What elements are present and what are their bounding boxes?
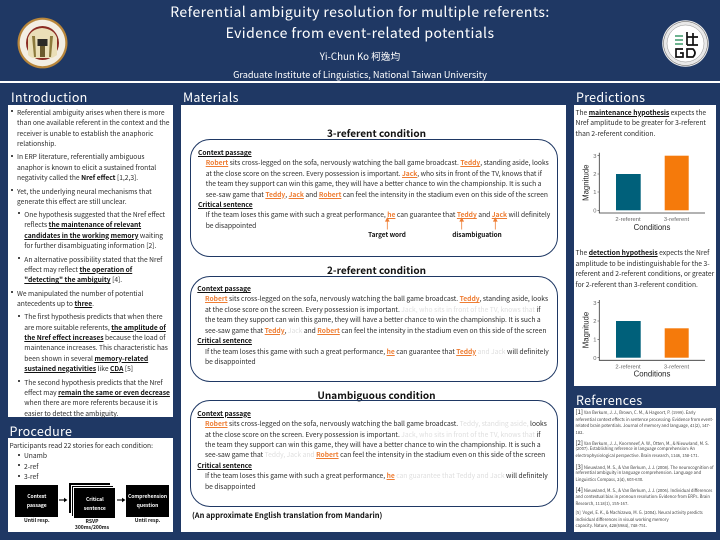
chart: detection hypothesis bars: 0 [593, 356, 596, 362]
panel: references [574, 408, 716, 532]
panel: procedure: 3-ref [24, 471, 38, 481]
panel: references: Linguistics Compass, 2(4), 603-630. [576, 477, 643, 483]
condition: 3-referent: be disappointed [206, 220, 256, 230]
panel: introduction: An alternative possibility stated that the Nref [24, 254, 162, 264]
panel: introduction: than one available referent in the context and the [17, 117, 169, 127]
header: title and author [18, 2, 709, 81]
logo: National Taiwan University seal [18, 18, 68, 68]
label: RSVP timing: RSVP [86, 518, 98, 525]
heading: 2-referent condition: 2-referent condition [327, 262, 426, 277]
condition: 3-referent: Robert sits cross-legged on the sofa, nervously watching the ball game broadcast. Teddy, standing aside, looks [206, 157, 549, 167]
panel: introduction: negativity called the Nref effect [1,2,3]. [17, 172, 138, 182]
condition: 2-referent: Context passage [197, 283, 251, 293]
heading: References: References [576, 390, 642, 408]
logo: Graduate Institute of Linguistics seal [662, 20, 709, 67]
panel: references: referential context effects in sentence processing: Evidence from event- [576, 417, 713, 423]
box stack: critical sentence: sentence [84, 505, 106, 512]
title [170, 2, 550, 43]
chart: maintenance hypothesis bars: 2 [593, 172, 596, 178]
panel: references: [5] Vogel, E. K., & Machizawa, M. G. (2004). Neural activity predicts [576, 510, 703, 516]
text: maintenance hypothesis: Nref amplitude to be greater for 3-referent [576, 117, 706, 127]
chart: maintenance hypothesis bars: 1 [593, 190, 596, 196]
panel: references: (2007). Establishing reference in language comprehension: An [576, 446, 695, 452]
panel: introduction: Referential ambiguity arises when there is more [17, 106, 165, 116]
condition: 3-referent: Critical sentence [198, 199, 253, 209]
panel: references: referential ambiguity in language comprehension. Language and [576, 470, 701, 476]
panel: procedure [8, 438, 173, 532]
condition: 3-referent: at the close score on the screen. Every possession is important. Jack, who sits in front of the TV, knows that if [206, 168, 542, 178]
box stack: critical sentence [69, 483, 115, 518]
condition: unambiguous: Robert sits cross-legged on the sofa, nervously watching the ball game broadcast. Teddy, standing aside, looks [205, 418, 547, 428]
panel: references: individual differences in visual working memory [576, 517, 669, 523]
condition: 2-referent: see-saw game that Teddy, Jack and Robert can feel the intensity in the stadium even on this side of the screen [205, 324, 546, 334]
condition: 2-referent: If the team loses this game with such a great performance, he can guarantee that Teddy and Jack will definitely [205, 346, 549, 356]
condition: 3-referent: the team they support can win this game, they will have a better chance to win the championship. It is such a [206, 178, 541, 188]
panel: introduction: anaphor is known to elicit a sustained frontal [17, 162, 156, 172]
text: detection hypothesis: referent and 2-referent conditions, or greater [576, 268, 714, 278]
panel: introduction: easier to detect the ambiguity. [24, 408, 118, 418]
label: target word: Target word [368, 230, 406, 238]
panel: introduction: The second hypothesis predicts that the Nref [24, 376, 163, 386]
heading: Introduction: Introduction [11, 86, 88, 106]
panel: introduction: One hypothesis suggested that the Nref effect [24, 209, 165, 219]
panel: introduction: when there are more referents because it is [24, 397, 158, 407]
heading: Procedure: Procedure [10, 420, 72, 440]
chart: maintenance hypothesis bars: Conditions [634, 223, 671, 232]
panel: references: and contextual bias in pronoun resolution: Evidence from ERPs. Brain [576, 494, 710, 500]
panel: introduction: the Nref effect increases because the load of [24, 332, 165, 342]
panel: introduction: generate this effect are still unclear. [17, 196, 127, 206]
panel: references: electrophysiological perspective. Brain research, 1146, 158-171. [576, 453, 699, 459]
panel: references: related brain potentials. Journal of memory and language, 41(2), 147- [576, 423, 710, 429]
box: context passage: Context [27, 493, 46, 500]
condition: 3-referent: see-saw game that Teddy, Jack and Robert can feel the intensity in the stadium even on this side of the screen [206, 188, 548, 198]
condition: 2-referent [190, 262, 558, 382]
heading: unambiguous condition: Unambiguous condition [317, 387, 436, 402]
condition: unambiguous: see-saw game that Teddy, Jack and Robert can feel the intensity in the stadium even on this side of the screen [205, 449, 545, 459]
chart: detection hypothesis bars [582, 300, 705, 378]
header divider [0, 81, 720, 83]
box: comprehension question: Comprehension [128, 493, 167, 500]
condition: 2-referent: Critical sentence [197, 335, 252, 345]
text: maintenance hypothesis: than 2-referent condition. [576, 128, 655, 138]
condition: 3-referent [190, 125, 558, 257]
panel: introduction: for further disambiguating information [2]. [24, 240, 156, 250]
text: detection hypothesis: for 2-referent than 3-referent condition. [576, 278, 698, 288]
box: comprehension question: question [137, 502, 158, 509]
text: detection hypothesis [576, 247, 714, 288]
condition: unambiguous: the team they support can win this game, they will have a better chance to win the championship. It is such a [205, 439, 541, 449]
arrow: critical to question [117, 498, 126, 502]
panel: references: [2] Van Berkum, J. J., Koornneef, A. W., Otten, M., & Nieuwland, M. S. [576, 438, 709, 447]
text: maintenance hypothesis: The maintenance hypothesis expects the [576, 107, 706, 117]
chart: maintenance hypothesis bars: 0 [593, 208, 596, 214]
panel: procedure: Unamb [24, 450, 47, 460]
panel: introduction: antecedents up to three. [17, 298, 94, 308]
chart: detection hypothesis bars: Magnitude [582, 312, 590, 348]
note: translation: (An approximate English translation from Mandarin) [192, 510, 382, 521]
chart: maintenance hypothesis bars: 3-referent [664, 217, 689, 223]
text: detection hypothesis: amplitude to be indistinguishable for the 3- [576, 258, 710, 268]
condition: unambiguous: Context passage [197, 408, 251, 418]
panel: materials [181, 105, 566, 532]
arrow: context to critical [59, 498, 68, 502]
title: Evidence from event-related potentials [226, 23, 494, 43]
heading: Predictions: Predictions [576, 86, 645, 106]
chart: maintenance hypothesis bars: Magnitude [582, 164, 590, 201]
condition: 3-referent: If the team loses this game with such a great performance, he can guarantee that Teddy and Jack will definitely [206, 209, 550, 219]
condition: 2-referent: Robert sits cross-legged on the sofa, nervously watching the ball game broadcast. Teddy, standing aside, looks [205, 293, 548, 303]
arrows: target word and disambiguation [385, 217, 498, 230]
condition: unambiguous [190, 387, 558, 507]
chart: maintenance hypothesis bars: 2-referent [615, 217, 641, 223]
chart: maintenance hypothesis bars: 3 [593, 154, 596, 160]
label: RSVP timing: 300ms/200ms [75, 524, 109, 531]
chart: detection hypothesis bars: 3 [593, 301, 596, 307]
panel: introduction: Yet, the underlying neural mechanisms that [17, 186, 152, 196]
panel: references: [3] Nieuwland, M. S., & Van Berkum, J. J. (2008). The neurocognition of [576, 462, 714, 471]
condition: unambiguous: be disappointed [205, 480, 256, 490]
panel: introduction: receiver is unable to establish the anaphoric [17, 128, 153, 138]
panel: introduction: "detecting" the ambiguity [4]. [24, 274, 122, 284]
label: disambiguation: disambiguation [452, 230, 502, 238]
affiliation: Graduate Institute of Linguistics, National Taiwan University [233, 67, 487, 81]
panel: procedure: Participants read 22 stories for each condition: [10, 440, 153, 450]
panel: introduction: maintenance increases. This characteristic has [24, 342, 168, 352]
title: Referential ambiguity resolution for multiple referents: [170, 2, 550, 22]
panel: references: Research, 1118(1), 155-167. [576, 501, 628, 507]
box stack: critical sentence: Critical [86, 496, 104, 503]
panel: references: capacity. Nature, 428(6984), 748-751. [576, 523, 647, 529]
condition: 2-referent: the team they support can win this game, they will have a better chance to win the championship. It is such a [205, 314, 541, 324]
condition: unambiguous: Critical sentence [197, 460, 252, 470]
condition: 3-referent: Context passage [198, 147, 252, 157]
panel: predictions [574, 105, 716, 386]
panel: introduction: effect may reflect the operation of [24, 264, 132, 274]
label: until response 1: Until resp. [24, 517, 50, 524]
condition: unambiguous: at the close score on the screen. Every possession is important. Jack, who sits in front of the TV, knows that if [205, 428, 540, 438]
panel: introduction: In ERP literature, referentially ambiguous [17, 151, 145, 161]
condition: 2-referent: be disappointed [205, 356, 256, 366]
chart: detection hypothesis bars: 3-referent [664, 364, 689, 370]
label: RSVP timing [75, 518, 109, 531]
heading: 3-referent condition: 3-referent condition [327, 125, 426, 140]
panel: introduction: candidates in the working memory waiting [24, 230, 163, 240]
panel: introduction: been shown in several memory-related [24, 352, 148, 362]
text: maintenance hypothesis [576, 107, 706, 138]
heading: Materials: Materials [183, 86, 239, 106]
chart: detection hypothesis bars: Conditions [634, 370, 671, 378]
panel: references: [1] Van Berkum, J. J., Brown, C. M., & Hagoort, P. (1999). Early [576, 407, 696, 416]
chart: detection hypothesis bars: 1 [593, 337, 596, 343]
box: context passage: passage [27, 502, 47, 509]
condition: unambiguous: If the team loses this game with such a great performance, he can guarantee that Teddy and Jack will definitely [205, 470, 548, 480]
panel: introduction: reflects the maintenance of relevant [24, 219, 141, 229]
text: detection hypothesis: The detection hypothesis expects the Nref [576, 247, 709, 257]
chart: detection hypothesis bars: 2-referent [615, 364, 641, 370]
chart: maintenance hypothesis bars [582, 152, 705, 232]
condition: 2-referent: at the close score on the screen. Every possession is important. Jack, who sits in front of the TV, knows that if [205, 304, 540, 314]
author: Yi-Chun Ko 柯逸均 [320, 48, 400, 62]
label: until response 2: Until resp. [135, 517, 160, 524]
panel: procedure: 2-ref [24, 460, 38, 470]
panel: introduction: are more suitable referents, the amplitude of [24, 322, 166, 332]
box: context passage [15, 485, 58, 517]
panel: introduction: relationship. [17, 138, 56, 148]
panel: references: [4] Nieuwland, M. S., & Van Berkum, J. J. (2006). Individual differences [576, 485, 712, 494]
panel: introduction: The first hypothesis predicts that when there [24, 311, 163, 321]
panel: introduction: effect may remain the same or even decrease [24, 387, 170, 397]
panel: introduction: We manipulated the number of potential [17, 288, 143, 298]
panel: references: 182. [576, 430, 584, 436]
panel: introduction [8, 105, 173, 417]
chart: detection hypothesis bars: 2 [593, 319, 596, 325]
panel: introduction: sustained negativities like CDA [5] [24, 363, 133, 373]
box: comprehension question [126, 485, 169, 517]
